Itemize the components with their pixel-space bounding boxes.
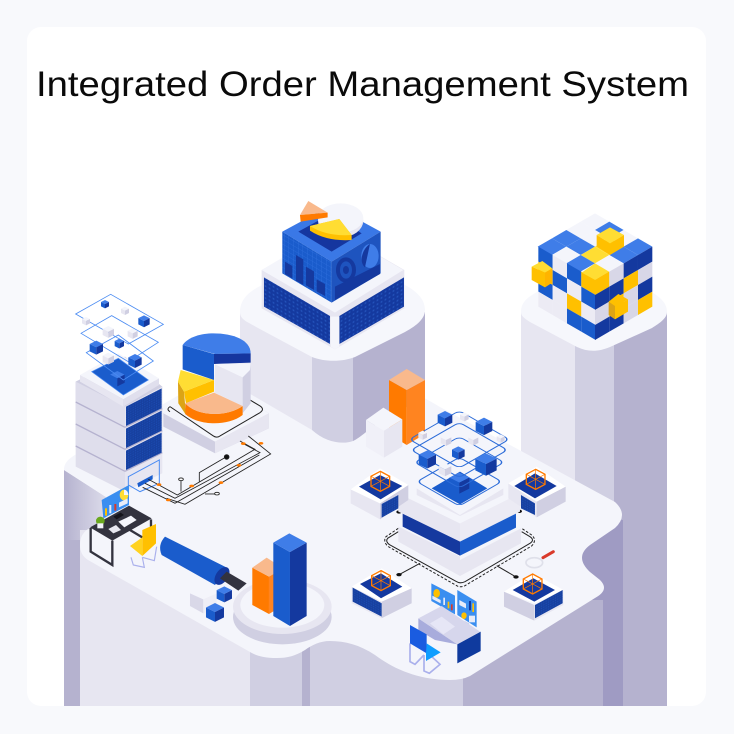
main platform top surface bbox=[64, 360, 622, 680]
central hub bbox=[398, 460, 521, 576]
yellow chair bbox=[130, 524, 157, 567]
pie on cube bbox=[300, 201, 363, 240]
dashboard monitor bbox=[102, 485, 129, 518]
circuit lines bbox=[143, 436, 271, 504]
orange bar bbox=[389, 369, 425, 445]
right tower bbox=[521, 258, 667, 706]
desk bbox=[418, 606, 481, 663]
desk frame bbox=[90, 506, 152, 565]
right cluster: bars, hub and stations bbox=[351, 369, 566, 621]
infographic canvas bbox=[40, 70, 686, 706]
analytics cube bbox=[282, 205, 381, 303]
keyboard, clipboard, plant bbox=[96, 513, 137, 533]
main platform side faces bbox=[64, 470, 623, 706]
ghost box and small cubes bbox=[190, 586, 232, 622]
blue chair bbox=[410, 625, 441, 673]
monitors bbox=[431, 583, 477, 630]
blue workstation bbox=[410, 583, 481, 673]
rubik data cube bbox=[532, 213, 652, 340]
blue cylinder bbox=[160, 537, 247, 591]
station top right bbox=[508, 467, 566, 517]
blue column bbox=[273, 533, 307, 626]
3D pie chart bbox=[178, 333, 251, 423]
chart plate bbox=[163, 383, 269, 453]
station bottom left bbox=[352, 568, 412, 618]
floating data planes bbox=[76, 294, 163, 380]
hub rounded data planes bbox=[409, 411, 509, 506]
data centre block on center tower bbox=[76, 201, 404, 504]
title: Integrated Order Management System bbox=[36, 65, 689, 104]
orange column bbox=[252, 558, 283, 614]
left foreground: cylinder and bars bbox=[160, 533, 332, 644]
hub floating cubes bbox=[418, 411, 505, 476]
station top left bbox=[351, 468, 408, 519]
dashed ring and solid connector bbox=[385, 510, 534, 587]
dark desk with dashboard bbox=[90, 485, 157, 567]
tier with blue panels bbox=[262, 256, 404, 348]
circular base bbox=[233, 579, 332, 644]
floating cubes bbox=[82, 300, 150, 368]
magnifier bbox=[526, 552, 553, 568]
station bottom right bbox=[504, 573, 563, 621]
isometric illustration bbox=[64, 201, 667, 706]
white box bbox=[366, 408, 402, 458]
center tower bbox=[240, 285, 425, 443]
server stack bbox=[76, 353, 162, 492]
